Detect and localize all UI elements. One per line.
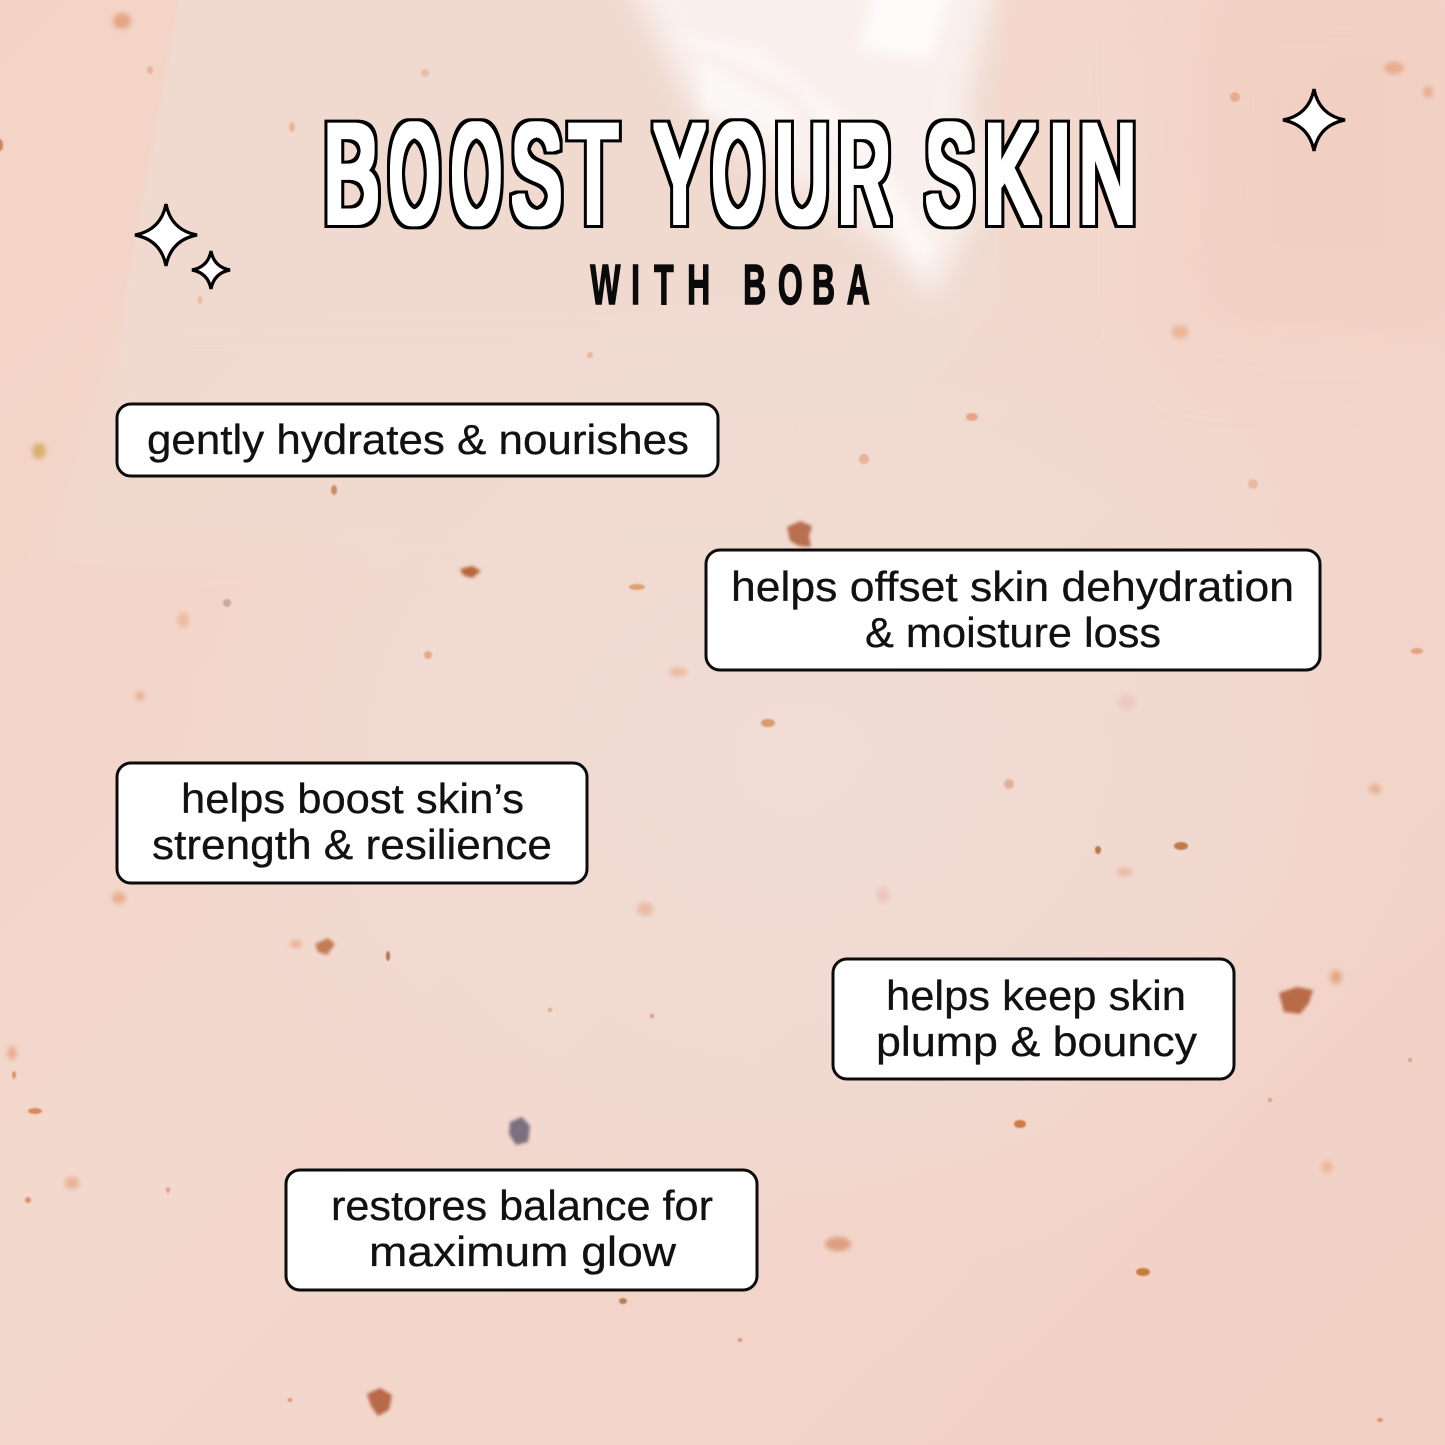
title: BOOST YOUR SKIN bbox=[324, 95, 1136, 252]
title: BOOST YOUR SKIN: O bbox=[390, 95, 439, 252]
callout: strength and resilience: strength & resilience bbox=[152, 821, 552, 868]
title: BOOST YOUR SKIN: K bbox=[984, 95, 1037, 252]
title: BOOST YOUR SKIN: O bbox=[452, 95, 501, 252]
title: BOOST YOUR SKIN: R bbox=[838, 95, 890, 252]
callout: strength and resilience bbox=[117, 763, 587, 883]
callout: gently hydrates: gently hydrates & nourishes bbox=[147, 416, 689, 463]
title: BOOST YOUR SKIN: I bbox=[1048, 95, 1072, 252]
title: BOOST YOUR SKIN: T bbox=[569, 95, 618, 252]
title: BOOST YOUR SKIN: U bbox=[775, 95, 829, 252]
callout: offset dehydration: helps offset skin dehydration bbox=[731, 563, 1294, 610]
icon: small sparkle left bbox=[192, 251, 230, 289]
title: BOOST YOUR SKIN: Y bbox=[655, 95, 705, 252]
callout: restores balance bbox=[286, 1170, 757, 1290]
title: BOOST YOUR SKIN: O bbox=[713, 95, 763, 252]
callout: plump and bouncy bbox=[833, 959, 1234, 1079]
callout: offset dehydration: & moisture loss bbox=[865, 609, 1161, 656]
callout: plump and bouncy: helps keep skin bbox=[886, 972, 1186, 1019]
callout: restores balance: restores balance for bbox=[331, 1182, 713, 1229]
title: BOOST YOUR SKIN: S bbox=[512, 95, 561, 252]
callout: strength and resilience: helps boost skin’s bbox=[181, 775, 524, 822]
icon: large sparkle left bbox=[135, 204, 197, 266]
callout: plump and bouncy: plump & bouncy bbox=[876, 1018, 1197, 1065]
title: BOOST YOUR SKIN: B bbox=[324, 95, 379, 252]
subtitle: WITH BOBA: WITH BOBA bbox=[590, 252, 870, 316]
callout: restores balance: maximum glow bbox=[369, 1228, 677, 1275]
title: BOOST YOUR SKIN: N bbox=[1079, 95, 1136, 252]
title: BOOST YOUR SKIN: S bbox=[926, 95, 973, 252]
callout: offset dehydration bbox=[706, 550, 1320, 670]
icon: sparkle right bbox=[1283, 89, 1345, 151]
callout: gently hydrates bbox=[117, 404, 718, 476]
